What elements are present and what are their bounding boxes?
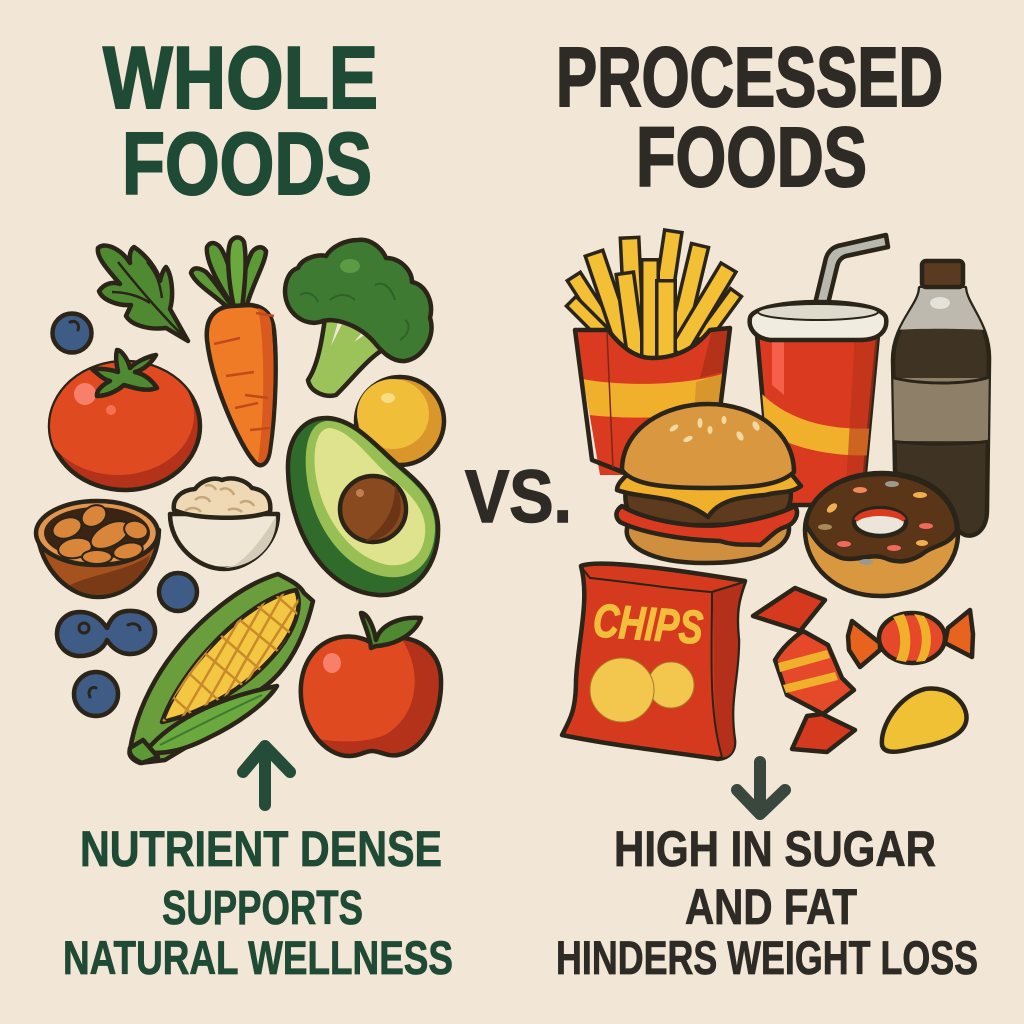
- title: whole foods: WHOLE: [103, 28, 378, 127]
- icon: grain bowl: [170, 478, 278, 569]
- title: whole foods: FOODS: [122, 114, 372, 213]
- panel: processed foods illustrations: [562, 235, 1000, 759]
- icon: bottle: [890, 258, 992, 538]
- title: processed foods: [556, 30, 943, 204]
- icon: burger: [616, 404, 801, 563]
- text block: whole foods benefits: NATURAL WELLNESS: [63, 931, 453, 984]
- icon: potato chip: [882, 688, 967, 752]
- icon: nut bowl: [36, 501, 159, 597]
- versus label: VS.: [465, 455, 572, 538]
- icon: leafy herb: [98, 246, 188, 341]
- panel: whole foods illustrations: [36, 237, 444, 763]
- text block: whole foods benefits: [63, 821, 453, 984]
- text block: processed foods drawbacks: [556, 821, 978, 984]
- icon: donut: [805, 473, 958, 596]
- icon: soda cup: [750, 235, 888, 505]
- icon: corn: [129, 574, 315, 763]
- icon: blueberries: [57, 573, 197, 716]
- icon: lemon: [356, 377, 444, 465]
- icon: broccoli: [285, 240, 432, 396]
- text block: processed foods drawbacks: AND FAT: [685, 879, 857, 935]
- title: whole foods: [103, 28, 378, 213]
- icon: wrapped candy: [753, 588, 855, 752]
- icon: striped candy: [848, 610, 973, 667]
- text block: whole foods benefits: NUTRIENT DENSE: [80, 821, 442, 877]
- icon: carrot: [191, 237, 276, 465]
- icon: french fries: [570, 240, 735, 475]
- text block: whole foods benefits: SUPPORTS: [162, 882, 363, 935]
- arrow: down: [737, 762, 785, 814]
- arrow: up: [243, 746, 290, 805]
- chips label: CHIPS: [591, 593, 705, 654]
- title: processed foods: FOODS: [636, 110, 867, 204]
- icon: tomato: [42, 350, 200, 490]
- icon: avocado: [288, 418, 438, 595]
- icon: blueberry: [52, 314, 92, 352]
- icon: chips bag: [562, 564, 745, 759]
- text block: processed foods drawbacks: HIGH IN SUGAR: [614, 821, 936, 877]
- icon: apple: [295, 613, 441, 756]
